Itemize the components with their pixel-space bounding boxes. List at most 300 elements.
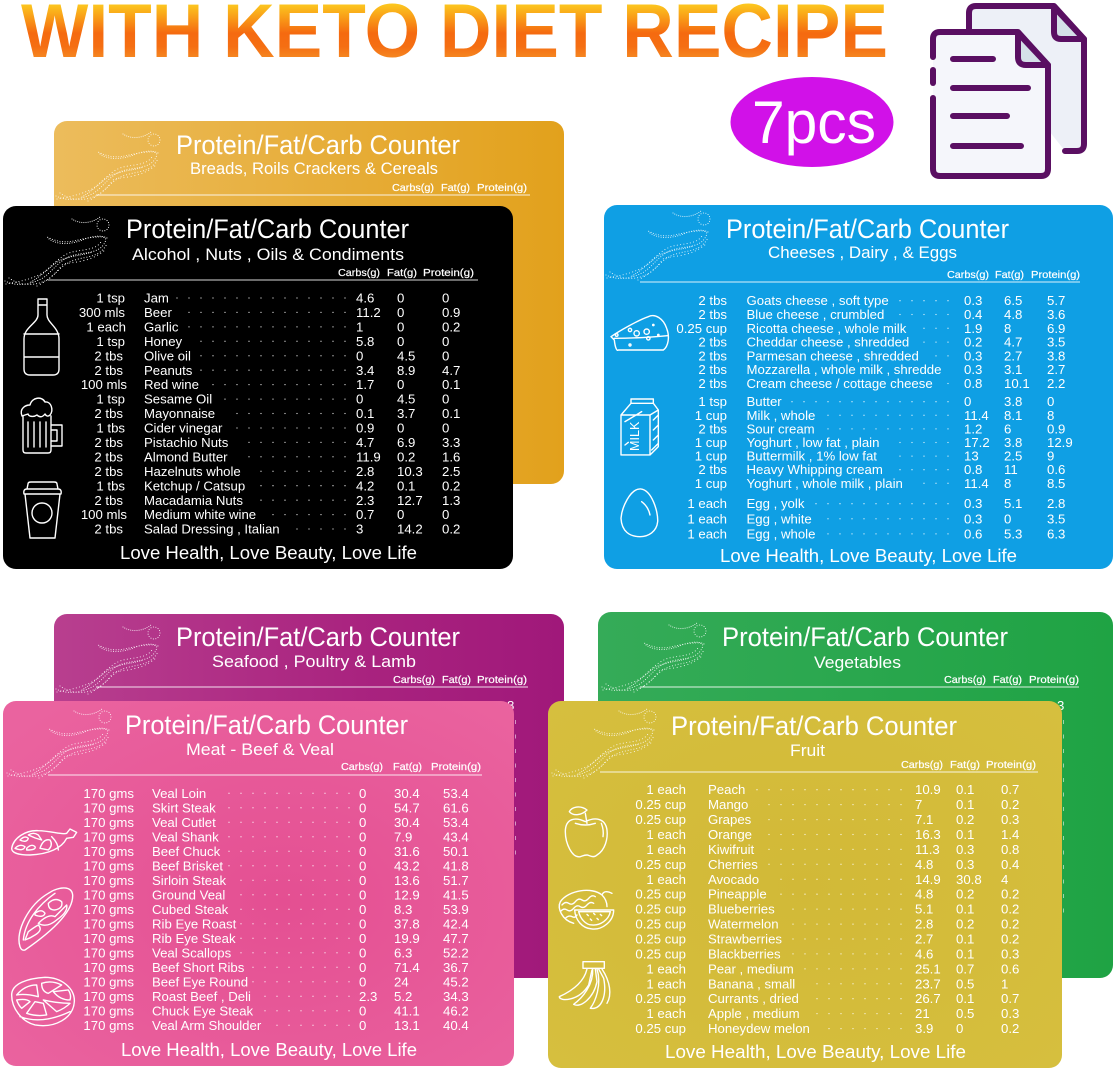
fat values: 0 bbox=[397, 291, 404, 306]
fat values: 37.8 bbox=[394, 916, 420, 931]
fat values: 0 bbox=[397, 319, 404, 334]
carbs values: 2.3 bbox=[359, 989, 377, 1004]
food names: Buttermilk , 1% low fat bbox=[746, 449, 877, 464]
carbs values: 2.8 bbox=[356, 464, 374, 479]
protein values: 53.9 bbox=[443, 902, 469, 917]
carbs values: 16.3 bbox=[915, 827, 941, 842]
serving quantities: 1 each bbox=[86, 319, 126, 334]
fat values: 30.8 bbox=[956, 872, 982, 887]
column headers: Protein(g) bbox=[431, 761, 481, 773]
fat values: 0.2 bbox=[397, 449, 415, 464]
fat values: 12.7 bbox=[397, 493, 423, 508]
protein values: 0.6 bbox=[1001, 961, 1019, 976]
carbs values: 0 bbox=[359, 873, 366, 888]
protein values: 46.2 bbox=[443, 1003, 469, 1018]
food names: Cubed Steak bbox=[152, 902, 229, 917]
card subheading: Fruit bbox=[790, 742, 825, 760]
food names: Yoghurt , whole milk , plain bbox=[746, 476, 903, 491]
serving quantities: 2 tbs bbox=[94, 348, 123, 363]
serving quantities: 0.25 cup bbox=[635, 812, 686, 827]
food names: Sirloin Steak bbox=[152, 873, 226, 888]
food names: Honey bbox=[144, 334, 183, 349]
fat values: 0.2 bbox=[956, 887, 974, 902]
carbs values: 11.4 bbox=[964, 408, 989, 423]
food names: Beef Short Ribs bbox=[152, 960, 245, 975]
serving quantities: 170 gms bbox=[83, 844, 134, 859]
serving quantities: 1 each bbox=[687, 526, 727, 541]
fat values: 71.4 bbox=[394, 960, 420, 975]
serving quantities: 170 gms bbox=[83, 815, 134, 830]
fat values: 0 bbox=[397, 507, 404, 522]
dot leaders bbox=[176, 298, 345, 529]
protein values: 2.2 bbox=[1047, 376, 1065, 391]
card heading: Protein/Fat/Carb Counter bbox=[176, 130, 460, 160]
icon: bottle bbox=[24, 299, 59, 375]
protein values: 52.2 bbox=[443, 945, 469, 960]
serving quantities: 2 tbs bbox=[94, 522, 123, 537]
fat values: 0.1 bbox=[397, 478, 415, 493]
fat values: 0.2 bbox=[956, 917, 974, 932]
carbs values: 1 bbox=[356, 319, 363, 334]
carbs values: 0 bbox=[359, 858, 366, 873]
serving quantities: 170 gms bbox=[83, 873, 134, 888]
column headers: Fat(g) bbox=[441, 182, 470, 194]
column headers: Fat(g) bbox=[950, 759, 980, 771]
carbs values: 0 bbox=[359, 902, 366, 917]
food names: Goats cheese , soft type bbox=[746, 293, 889, 308]
protein values: 0.2 bbox=[1001, 797, 1019, 812]
carbs values: 0 bbox=[359, 960, 366, 975]
food names: Ricotta cheese , whole milk bbox=[746, 321, 907, 336]
serving quantities: 2 tbs bbox=[94, 493, 123, 508]
carbs values: 2.8 bbox=[915, 917, 933, 932]
fat values: 54.7 bbox=[394, 800, 420, 815]
protein values: 8 bbox=[1047, 408, 1054, 423]
panel: vegetables card bbox=[598, 612, 1113, 978]
serving quantities: 1 each bbox=[646, 1006, 686, 1021]
food names: Beef Brisket bbox=[152, 858, 223, 873]
fat values: 3.8 bbox=[1004, 435, 1022, 450]
carbs values: 0 bbox=[359, 945, 366, 960]
carbs values: 0 bbox=[359, 786, 366, 801]
protein values: 53.4 bbox=[443, 786, 469, 801]
carbs values: 0 bbox=[359, 815, 366, 830]
food names: Pear , medium bbox=[708, 961, 794, 976]
protein values: 0 bbox=[442, 291, 449, 306]
fat values: 0.1 bbox=[956, 991, 974, 1006]
serving quantities: 0.25 cup bbox=[635, 797, 686, 812]
protein values: 0.6 bbox=[1047, 462, 1065, 477]
carbs values: 11.3 bbox=[915, 842, 940, 857]
protein values: 1.6 bbox=[442, 449, 460, 464]
food names: Cider vinegar bbox=[144, 421, 223, 436]
food names: Mango bbox=[708, 797, 748, 812]
protein values: 4.7 bbox=[442, 363, 460, 378]
serving quantities: 170 gms bbox=[83, 1003, 134, 1018]
food names: Egg , yolk bbox=[746, 496, 805, 511]
fat values: 12.9 bbox=[394, 887, 420, 902]
protein values: 9 bbox=[1047, 449, 1054, 464]
dot leaders bbox=[750, 790, 901, 1029]
card footer: Love Health, Love Beauty, Love Life bbox=[121, 1039, 417, 1060]
protein values: 3.6 bbox=[1047, 307, 1065, 322]
fat values: 7.9 bbox=[394, 829, 412, 844]
food names: Veal Loin bbox=[152, 786, 206, 801]
column headers: Fat(g) bbox=[387, 267, 417, 279]
carbs values: 4.6 bbox=[356, 291, 374, 306]
serving quantities: 1 cup bbox=[695, 476, 727, 491]
carbs values: 3.4 bbox=[356, 363, 374, 378]
fat values: 13.1 bbox=[394, 1018, 420, 1033]
food names: Blue cheese , crumbled bbox=[746, 307, 884, 322]
food names: Cherries bbox=[708, 857, 758, 872]
protein values: 50.1 bbox=[443, 844, 469, 859]
carbs values: 0 bbox=[359, 974, 366, 989]
protein values: 2.8 bbox=[1047, 496, 1065, 511]
food names: Beef Chuck bbox=[152, 844, 221, 859]
protein values: 0 bbox=[442, 334, 449, 349]
food names: Cheddar cheese , shredded bbox=[746, 335, 909, 350]
carbs values: 0.3 bbox=[964, 348, 982, 363]
carbs values: 0.9 bbox=[356, 421, 374, 436]
carbs values: 5.8 bbox=[356, 334, 374, 349]
carbs values: 4.7 bbox=[356, 435, 374, 450]
carbs values: 4.6 bbox=[915, 946, 933, 961]
food names: Egg , whole bbox=[746, 526, 815, 541]
protein values: 0.4 bbox=[1001, 857, 1019, 872]
fat values: 0.5 bbox=[956, 976, 974, 991]
fat values: 14.2 bbox=[397, 522, 423, 537]
serving quantities: 2 tbs bbox=[698, 462, 727, 477]
serving quantities: 2 tbs bbox=[94, 406, 123, 421]
fat values: 0.7 bbox=[956, 961, 974, 976]
food names: Yoghurt , low fat , plain bbox=[746, 435, 879, 450]
food names: Rib Eye Roast bbox=[152, 916, 237, 931]
serving quantities: 1 each bbox=[687, 511, 727, 526]
serving quantities: 2 tbs bbox=[94, 449, 123, 464]
panel: fruit card bbox=[548, 701, 1062, 1068]
carbs values: 21 bbox=[915, 1006, 930, 1021]
protein values: 51.7 bbox=[443, 873, 469, 888]
column headers bbox=[338, 267, 474, 279]
carbs values: 0 bbox=[359, 844, 366, 859]
protein values: 0 bbox=[442, 421, 449, 436]
icon: milk carton bbox=[621, 399, 658, 455]
protein values: 45.2 bbox=[443, 974, 469, 989]
column headers: Protein(g) bbox=[986, 759, 1036, 771]
icon: beer mug bbox=[21, 398, 62, 453]
protein values: 47.7 bbox=[443, 931, 469, 946]
food names: Strawberries bbox=[708, 932, 782, 946]
serving quantities: 2 tbs bbox=[698, 362, 727, 377]
carbs values: 0.8 bbox=[964, 376, 982, 391]
carbs values: 0.2 bbox=[964, 335, 982, 350]
serving quantities: 0.25 cup bbox=[635, 946, 686, 961]
protein values: 0.9 bbox=[442, 305, 460, 320]
protein values: 0 bbox=[1047, 394, 1054, 409]
serving quantities: 0.25 cup bbox=[635, 902, 686, 917]
protein values: 0.2 bbox=[1001, 932, 1019, 946]
protein values: 3.3 bbox=[442, 435, 460, 450]
carbs values: 4.8 bbox=[915, 887, 933, 902]
protein values: 0 bbox=[442, 507, 449, 522]
serving quantities: 2 tbs bbox=[94, 363, 123, 378]
fat values: 0 bbox=[1004, 511, 1011, 526]
column headers: Carbs(g) bbox=[392, 182, 434, 194]
serving quantities: 0.25 cup bbox=[635, 917, 686, 932]
panel: dairy card bbox=[604, 205, 1113, 569]
carbs values: 0.1 bbox=[356, 406, 374, 421]
food names: Cream cheese / cottage cheese bbox=[746, 376, 933, 391]
clipped value: 8 bbox=[507, 698, 514, 713]
column headers: Fat(g) bbox=[993, 674, 1022, 686]
card subheading: Cheeses , Dairy , & Eggs bbox=[768, 244, 957, 262]
fat values: 0 bbox=[397, 305, 404, 320]
food names: Parmesan cheese , shredded bbox=[746, 348, 919, 363]
protein values: 0 bbox=[442, 348, 449, 363]
protein values: 0.3 bbox=[1001, 946, 1019, 961]
column headers: Protein(g) bbox=[1031, 269, 1080, 281]
decoration: sparkle swoosh bbox=[552, 709, 656, 778]
protein values: 53.4 bbox=[443, 815, 469, 830]
icon: milk carton: MILK bbox=[627, 422, 642, 451]
serving quantities: 1 each bbox=[646, 976, 686, 991]
food names: Jam bbox=[144, 291, 169, 306]
serving quantities: 0.25 cup bbox=[676, 321, 727, 336]
fat values: 0 bbox=[956, 1021, 963, 1036]
fat values: 30.4 bbox=[394, 786, 420, 801]
serving quantities: 1 tsp bbox=[96, 334, 125, 349]
carbs values: 7.1 bbox=[915, 812, 933, 827]
carbs values: 0.7 bbox=[356, 507, 374, 522]
serving quantities: 2 tbs bbox=[94, 435, 123, 450]
serving quantities: 1 tsp bbox=[698, 394, 727, 409]
serving quantities: 2 tbs bbox=[698, 421, 727, 436]
carbs values: 11.2 bbox=[356, 305, 381, 320]
protein values: 0.3 bbox=[1001, 1006, 1019, 1021]
food names: Roast Beef , Deli bbox=[152, 989, 251, 1004]
food names: Skirt Steak bbox=[152, 800, 216, 815]
protein values: 0.7 bbox=[1001, 991, 1019, 1006]
food names: Ketchup / Catsup bbox=[144, 478, 245, 493]
protein values: 0.8 bbox=[1001, 842, 1019, 857]
carbs values: 0 bbox=[359, 931, 366, 946]
fat values: 0.2 bbox=[956, 812, 974, 827]
serving quantities: 170 gms bbox=[83, 989, 134, 1004]
panel: meat card bbox=[3, 701, 514, 1066]
carbs values: 4.8 bbox=[915, 857, 933, 872]
carbs values: 25.1 bbox=[915, 961, 941, 976]
food names: Banana , small bbox=[708, 976, 795, 991]
fat values: 10.1 bbox=[1004, 376, 1030, 391]
serving quantities: 170 gms bbox=[83, 960, 134, 975]
decoration: sparkle swoosh bbox=[606, 211, 710, 280]
protein values: 0.2 bbox=[442, 319, 460, 334]
protein values: 6.3 bbox=[1047, 526, 1065, 541]
food names: Pineapple bbox=[708, 887, 767, 902]
icon: bananas bbox=[559, 962, 610, 1008]
card footer: Love Health, Love Beauty, Love Life bbox=[665, 1041, 966, 1062]
serving quantities: 170 gms bbox=[83, 931, 134, 946]
protein values: 8.5 bbox=[1047, 476, 1065, 491]
column headers: Carbs(g) bbox=[338, 267, 380, 279]
decoration: sparkle swoosh bbox=[56, 132, 160, 201]
food names: Mayonnaise bbox=[144, 406, 215, 421]
column headers: Carbs(g) bbox=[947, 269, 989, 281]
fat values: 0.3 bbox=[956, 842, 974, 857]
fat values: 0 bbox=[397, 377, 404, 392]
serving quantities: 2 tbs bbox=[698, 293, 727, 308]
serving quantities: 1 cup bbox=[695, 408, 727, 423]
food names: Mozzarella , whole milk , shredde bbox=[746, 362, 941, 377]
fat values: 5.2 bbox=[394, 989, 412, 1004]
food names: Kiwifruit bbox=[708, 842, 754, 857]
fat values: 4.8 bbox=[1004, 307, 1022, 322]
protein values: 34.3 bbox=[443, 989, 469, 1004]
serving quantities: 1 cup bbox=[695, 449, 727, 464]
serving quantities: 2 tbs bbox=[698, 376, 727, 391]
protein values: 1.4 bbox=[1001, 827, 1019, 842]
fat values: 8 bbox=[1004, 476, 1011, 491]
serving quantities: 100 mls bbox=[81, 507, 127, 522]
carbs values: 10.9 bbox=[915, 782, 941, 797]
food names: Egg , white bbox=[746, 511, 812, 526]
column headers: Carbs(g) bbox=[901, 759, 943, 771]
carbs values: 0 bbox=[359, 1003, 366, 1018]
decoration: sparkle swoosh bbox=[5, 217, 109, 286]
fat values: 0 bbox=[397, 334, 404, 349]
fat values: 11 bbox=[1004, 462, 1018, 477]
food names: Rib Eye Steak bbox=[152, 931, 236, 946]
fat values: 2.5 bbox=[1004, 449, 1022, 464]
panel: alcohol card bbox=[3, 206, 513, 569]
fat values: 0.5 bbox=[956, 1006, 974, 1021]
serving quantities: 170 gms bbox=[83, 945, 134, 960]
protein values: 0.3 bbox=[1001, 812, 1019, 827]
serving quantities: 1 cup bbox=[695, 435, 727, 450]
fat values: 0.1 bbox=[956, 902, 974, 917]
serving quantities: 0.25 cup bbox=[635, 857, 686, 872]
badge: 7pcs bbox=[730, 77, 894, 167]
carbs values: 3 bbox=[356, 522, 363, 537]
food names: Sour cream bbox=[746, 421, 815, 436]
icon: round steak bbox=[12, 977, 74, 1026]
protein values: 0.2 bbox=[1001, 1021, 1019, 1036]
carbs values: 11.9 bbox=[356, 449, 381, 464]
fat values: 0.1 bbox=[956, 827, 974, 842]
carbs values: 11.4 bbox=[964, 476, 989, 491]
carbs values: 4.2 bbox=[356, 478, 374, 493]
serving quantities: 2 tbs bbox=[94, 464, 123, 479]
card subheading: Seafood , Poultry & Lamb bbox=[212, 653, 416, 671]
food names: Pistachio Nuts bbox=[144, 435, 229, 450]
icon: steak bbox=[19, 888, 73, 950]
card subheading: Vegetables bbox=[814, 654, 901, 672]
food names: Honeydew melon bbox=[708, 1021, 810, 1036]
icon: watermelon bbox=[559, 890, 614, 929]
column headers: Protein(g) bbox=[477, 182, 527, 194]
fat values: 4.5 bbox=[397, 392, 415, 407]
fat values: 19.9 bbox=[394, 931, 420, 946]
food names: Butter bbox=[746, 394, 782, 409]
serving quantities: 0.25 cup bbox=[635, 1021, 686, 1036]
serving quantities: 170 gms bbox=[83, 858, 134, 873]
serving quantities: 170 gms bbox=[83, 902, 134, 917]
fat values: 0 bbox=[397, 421, 404, 436]
serving quantities: 170 gms bbox=[83, 786, 134, 801]
carbs values: 0.3 bbox=[964, 362, 982, 377]
protein values: 4 bbox=[1001, 872, 1008, 887]
carbs values: 2.3 bbox=[356, 493, 374, 508]
column headers: Carbs(g) bbox=[393, 674, 435, 686]
carbs values: 7 bbox=[915, 797, 922, 812]
carbs values: 0 bbox=[359, 1018, 366, 1033]
column headers bbox=[393, 674, 527, 686]
serving quantities: 1 each bbox=[646, 961, 686, 976]
protein values: 0.7 bbox=[1001, 782, 1019, 797]
food names: Blueberries bbox=[708, 902, 775, 917]
carbs values: 0 bbox=[359, 800, 366, 815]
fat values: 4.5 bbox=[397, 348, 415, 363]
carbs values: 3.9 bbox=[915, 1021, 933, 1036]
food names: Olive oil bbox=[144, 348, 191, 363]
fat values: 8 bbox=[1004, 321, 1011, 336]
protein values: 41.8 bbox=[443, 858, 469, 873]
protein values: 0.2 bbox=[442, 478, 460, 493]
protein values: 0.2 bbox=[1001, 917, 1019, 932]
food names: Beef Eye Round bbox=[152, 974, 248, 989]
fat values: 4.7 bbox=[1004, 335, 1022, 350]
food names: Milk , whole bbox=[746, 408, 815, 423]
serving quantities: 300 mls bbox=[79, 305, 125, 320]
dot leaders bbox=[222, 793, 349, 1025]
serving quantities: 100 mls bbox=[81, 377, 127, 392]
carbs values: 26.7 bbox=[915, 991, 941, 1006]
icon: documents bbox=[933, 6, 1084, 176]
protein values: 2.5 bbox=[442, 464, 460, 479]
column headers bbox=[947, 269, 1080, 281]
food names: Watermelon bbox=[708, 917, 779, 932]
food names: Veal Shank bbox=[152, 829, 219, 844]
protein values: 0.1 bbox=[442, 406, 460, 421]
card heading: Protein/Fat/Carb Counter bbox=[176, 622, 460, 652]
serving quantities: 1 each bbox=[687, 496, 727, 511]
fat values: 0.1 bbox=[956, 946, 974, 961]
dot leaders bbox=[788, 301, 948, 534]
carbs values: 0 bbox=[356, 392, 363, 407]
food names: Beer bbox=[144, 305, 172, 320]
fat values: 3.1 bbox=[1004, 362, 1022, 377]
protein values: 0.9 bbox=[1047, 421, 1065, 436]
protein values: 3.8 bbox=[1047, 348, 1065, 363]
carbs values: 0 bbox=[359, 916, 366, 931]
protein values: 2.7 bbox=[1047, 362, 1065, 377]
card subheading: Breads, Roils Crackers & Cereals bbox=[190, 160, 438, 178]
carbs values: 17.2 bbox=[964, 435, 990, 450]
serving quantities: 170 gms bbox=[83, 800, 134, 815]
food names: Salad Dressing , Italian bbox=[144, 522, 280, 537]
fat values: 6.3 bbox=[394, 945, 412, 960]
column headers: Carbs(g) bbox=[944, 674, 986, 686]
serving quantities: 1 each bbox=[646, 827, 686, 842]
column headers: Carbs(g) bbox=[341, 761, 383, 773]
decoration: sparkle swoosh bbox=[7, 709, 111, 778]
fat values: 8.3 bbox=[394, 902, 412, 917]
fat values: 6.9 bbox=[397, 435, 415, 450]
carbs values: 13 bbox=[964, 449, 979, 464]
protein values: 3.5 bbox=[1047, 335, 1065, 350]
food names: Orange bbox=[708, 827, 752, 842]
